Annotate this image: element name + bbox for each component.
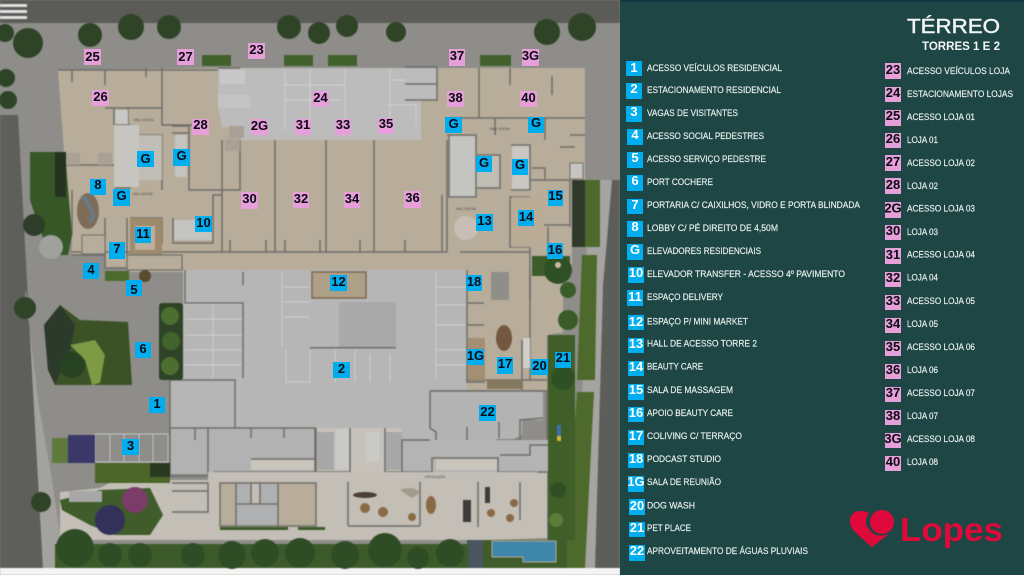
item 36: LOJA 06	[907, 365, 938, 376]
item 36	[885, 362, 938, 379]
item 32: LOJA 04	[907, 272, 938, 284]
item 2	[626, 81, 781, 99]
item 14: 14	[629, 359, 644, 374]
item 20	[629, 498, 695, 515]
item 7: 7	[631, 197, 639, 212]
marker G	[113, 188, 130, 206]
marker 13: 13	[477, 213, 492, 228]
item 1G: SALA DE REUNIÃO	[647, 477, 721, 488]
item 22: 22	[630, 543, 644, 558]
item 30: 30	[886, 223, 900, 238]
item 20: 20	[630, 498, 644, 513]
item 17: 17	[629, 428, 643, 443]
legend: residential list	[626, 60, 861, 561]
marker 23: 23	[249, 42, 264, 57]
item 3: 3	[630, 104, 638, 119]
item 28: LOJA 02	[907, 181, 938, 192]
item G: ELEVADORES RESIDENCIAIS	[647, 246, 761, 257]
item 17	[628, 428, 742, 445]
marker 3: 3	[127, 438, 134, 453]
item 7: PORTARIA C/ CAIXILHOS, VIDRO E PORTA BLINDADA	[647, 200, 861, 211]
marker 11: 11	[136, 226, 150, 241]
item 4: ACESSO SOCIAL PEDESTRES	[647, 131, 764, 142]
marker G	[137, 151, 154, 167]
item 22	[629, 543, 808, 561]
marker 2: 2	[338, 361, 345, 376]
item 32: 32	[886, 270, 900, 285]
item 5: ACESSO SERVIÇO PEDESTRE	[647, 154, 766, 165]
marker 12: 12	[331, 274, 346, 289]
marker 31: 31	[296, 117, 310, 132]
marker 1: 1	[153, 396, 161, 411]
marker G	[528, 115, 544, 133]
item 20: DOG WASH	[647, 500, 695, 512]
marker 21: 21	[556, 350, 570, 365]
marker 26: 26	[93, 89, 108, 104]
residential and store floor	[58, 68, 585, 390]
item 10	[628, 265, 845, 283]
marker G: G	[140, 151, 151, 166]
item 21	[629, 520, 691, 537]
marker 27: 27	[178, 49, 193, 64]
Lopes logo	[850, 507, 1003, 548]
item 15: 15	[629, 382, 643, 397]
item 2G	[884, 200, 975, 218]
marker 17: 17	[498, 356, 512, 371]
central parking	[170, 270, 467, 470]
streets and sidewalks	[0, 0, 620, 575]
item 15	[628, 382, 733, 400]
item 13	[628, 336, 757, 353]
item 40	[885, 454, 938, 471]
room labels: HALL SOCIAL	[490, 127, 510, 131]
item 23	[885, 62, 1011, 79]
marker 33: 33	[336, 117, 350, 132]
item 13: HALL DE ACESSO TORRE 2	[647, 338, 757, 350]
item 26	[885, 131, 938, 148]
item 37: 37	[886, 385, 900, 400]
icon: heart	[850, 507, 896, 547]
item 16: APOIO BEAUTY CARE	[647, 408, 733, 419]
item 35: 35	[886, 339, 900, 354]
marker 5	[126, 280, 142, 297]
marker G	[445, 116, 462, 133]
marker 1	[149, 396, 165, 413]
marker 7	[109, 241, 125, 259]
floor plan	[0, 0, 620, 575]
marker 34: 34	[345, 191, 360, 206]
marker 24: 24	[313, 90, 328, 105]
item 13: 13	[629, 336, 643, 351]
marker 4	[83, 262, 99, 279]
item 38	[885, 408, 938, 425]
marker 6: 6	[139, 341, 147, 356]
marker 10: 10	[196, 215, 211, 230]
item 15: SALA DE MASSAGEM	[647, 385, 733, 396]
item 7	[627, 197, 861, 214]
marker 3G: 3G	[522, 48, 539, 63]
marker G: G	[479, 155, 489, 170]
item 23: ACESSO VEÍCULOS LOJA	[907, 66, 1011, 77]
item 8: 8	[631, 219, 639, 234]
item 3G: 3G	[884, 431, 902, 446]
item 35: ACESSO LOJA 06	[907, 342, 975, 353]
item 24: 24	[886, 85, 901, 100]
item 5	[627, 150, 766, 168]
right lawns	[565, 180, 600, 568]
marker G: G	[515, 157, 525, 172]
item 40: 40	[886, 454, 900, 469]
tower 2 core and right stores	[442, 68, 585, 300]
item 23: 23	[886, 62, 900, 77]
marker 37: 37	[450, 48, 464, 63]
item 16	[628, 405, 733, 422]
item 11: 11	[628, 289, 642, 304]
map markers	[83, 42, 571, 455]
item 35	[885, 339, 975, 356]
item 6: PORT COCHERE	[647, 177, 713, 188]
marker G: G	[531, 115, 541, 130]
room labels	[133, 118, 510, 479]
item 3G	[884, 431, 975, 448]
marker 22: 22	[480, 404, 495, 419]
marker G	[512, 157, 528, 175]
item 8	[627, 219, 778, 237]
item 33: 33	[886, 293, 900, 308]
item 26: LOJA 01	[907, 135, 938, 146]
marker 8	[90, 177, 106, 195]
item 2G: 2G	[884, 200, 902, 216]
marker 8: 8	[94, 177, 102, 192]
item 31	[885, 247, 975, 264]
marker 15: 15	[548, 188, 563, 203]
item 38: 38	[886, 408, 900, 423]
room labels: HALL SOCIAL	[456, 207, 476, 211]
item 26: 26	[886, 131, 900, 146]
Lopes logo: Lopes	[900, 511, 1003, 548]
item 10: 10	[629, 265, 643, 280]
item 37: ACESSO LOJA 07	[907, 388, 975, 399]
marker 36: 36	[405, 190, 420, 205]
marker 2G: 2G	[251, 118, 268, 133]
item 4: 4	[631, 127, 639, 142]
delivery and transfer rooms	[82, 218, 212, 270]
item 32	[885, 270, 938, 287]
item 34: 34	[886, 316, 901, 331]
reservoir block 22	[430, 391, 547, 450]
item 25	[885, 108, 975, 126]
marker 30: 30	[242, 191, 257, 206]
marker 7: 7	[113, 241, 121, 256]
item 8: LOBBY C/ PÉ DIREITO DE 4,50M	[647, 223, 778, 234]
item 37	[885, 385, 975, 402]
marker 38: 38	[448, 90, 463, 105]
item 21: 21	[630, 520, 644, 535]
item 24	[885, 85, 1013, 102]
item 27: ACESSO LOJA 02	[907, 158, 975, 169]
marker 4: 4	[87, 262, 95, 277]
room labels: CIRCULAÇÃO	[425, 474, 446, 479]
item 11: ESPAÇO DELIVERY	[647, 292, 724, 303]
title: TÉRREO	[907, 15, 1000, 38]
item 17: COLIVING C/ TERRAÇO	[647, 431, 742, 442]
item 2: ESTACIONAMENTO RESIDENCIAL	[647, 85, 781, 96]
item 1	[626, 60, 782, 76]
marker 3	[122, 438, 139, 455]
parking stripes	[95, 434, 168, 462]
item 27	[885, 154, 975, 171]
marker 14: 14	[519, 209, 534, 224]
item 18: 18	[629, 451, 643, 466]
item 12	[628, 314, 748, 330]
item 3: VAGAS DE VISITANTES	[647, 108, 738, 119]
item 1G	[627, 474, 721, 492]
item 14: BEAUTY CARE	[647, 362, 703, 372]
room labels: HALL SOCIAL	[133, 192, 153, 196]
item 27: 27	[886, 154, 900, 169]
item 21: PET PLACE	[647, 523, 691, 534]
item 22: APROVEITAMENTO DE ÁGUAS PLUVIAIS	[647, 546, 808, 557]
item 14	[628, 359, 703, 376]
item 34: LOJA 05	[907, 319, 938, 330]
marker G: G	[116, 188, 127, 203]
item 36: 36	[886, 362, 900, 377]
item 2: 2	[630, 81, 638, 96]
marker G	[173, 148, 190, 166]
item G	[627, 242, 761, 260]
marker 32: 32	[294, 191, 308, 206]
marker 6	[135, 341, 151, 358]
item 5: 5	[631, 150, 639, 165]
item G: G	[630, 242, 640, 257]
item 12: 12	[629, 314, 643, 329]
item 1: 1	[630, 60, 638, 75]
item 6: 6	[631, 173, 639, 188]
item 1G: 1G	[627, 474, 645, 489]
lower amenities floor	[60, 472, 548, 540]
item 10: ELEVADOR TRANSFER - ACESSO 4º PAVIMENTO	[647, 269, 845, 280]
item 40: LOJA 08	[907, 457, 938, 468]
item 31: ACESSO LOJA 04	[907, 250, 975, 260]
item 6	[627, 173, 713, 191]
marker 18: 18	[467, 274, 481, 289]
room labels: HALL SOCIAL	[134, 118, 154, 122]
item 18: PODCAST STUDIO	[647, 454, 721, 465]
item 12: ESPAÇO P/ MINI MARKET	[647, 316, 748, 328]
store parking	[218, 67, 437, 140]
marker 5: 5	[130, 282, 138, 297]
marker G	[476, 155, 492, 172]
item 28	[885, 177, 938, 194]
coliving, podcast and mini market	[312, 270, 548, 390]
item 30	[885, 223, 938, 240]
marker G: G	[176, 148, 187, 163]
item 28: 28	[886, 177, 900, 192]
marker 2	[333, 361, 350, 378]
item 30: LOJA 03	[907, 227, 938, 238]
item 4	[627, 127, 764, 145]
legend: stores list	[884, 62, 1013, 471]
item 33	[885, 293, 975, 310]
item 1: ACESSO VEÍCULOS RESIDENCIAL	[647, 63, 782, 74]
lower service rooms	[170, 380, 548, 476]
item 3G: ACESSO LOJA 08	[907, 434, 975, 445]
marker G: G	[448, 116, 459, 131]
item 3	[626, 104, 738, 122]
marker 40: 40	[521, 90, 536, 105]
item 34	[885, 316, 938, 333]
lobby pond	[77, 193, 99, 229]
item 16: 16	[629, 405, 643, 420]
marker 20: 20	[532, 358, 547, 373]
item 25: ACESSO LOJA 01	[907, 112, 975, 123]
item 25: 25	[886, 108, 900, 123]
item 38: LOJA 07	[907, 411, 938, 422]
marker 25: 25	[85, 49, 100, 64]
planting and trees	[0, 13, 596, 569]
item 11	[627, 289, 724, 306]
item 33: ACESSO LOJA 05	[907, 296, 975, 307]
subtitle: TORRES 1 E 2	[922, 41, 1000, 53]
legend panel	[620, 0, 1024, 575]
marker 35: 35	[379, 116, 393, 131]
interior walls upper left stores	[58, 68, 447, 268]
marker 1G: 1G	[467, 348, 484, 363]
item 18	[628, 451, 721, 468]
item 31: 31	[886, 247, 900, 262]
marker 16: 16	[548, 242, 562, 257]
item 2G: ACESSO LOJA 03	[907, 204, 975, 214]
marker 28: 28	[193, 117, 208, 132]
